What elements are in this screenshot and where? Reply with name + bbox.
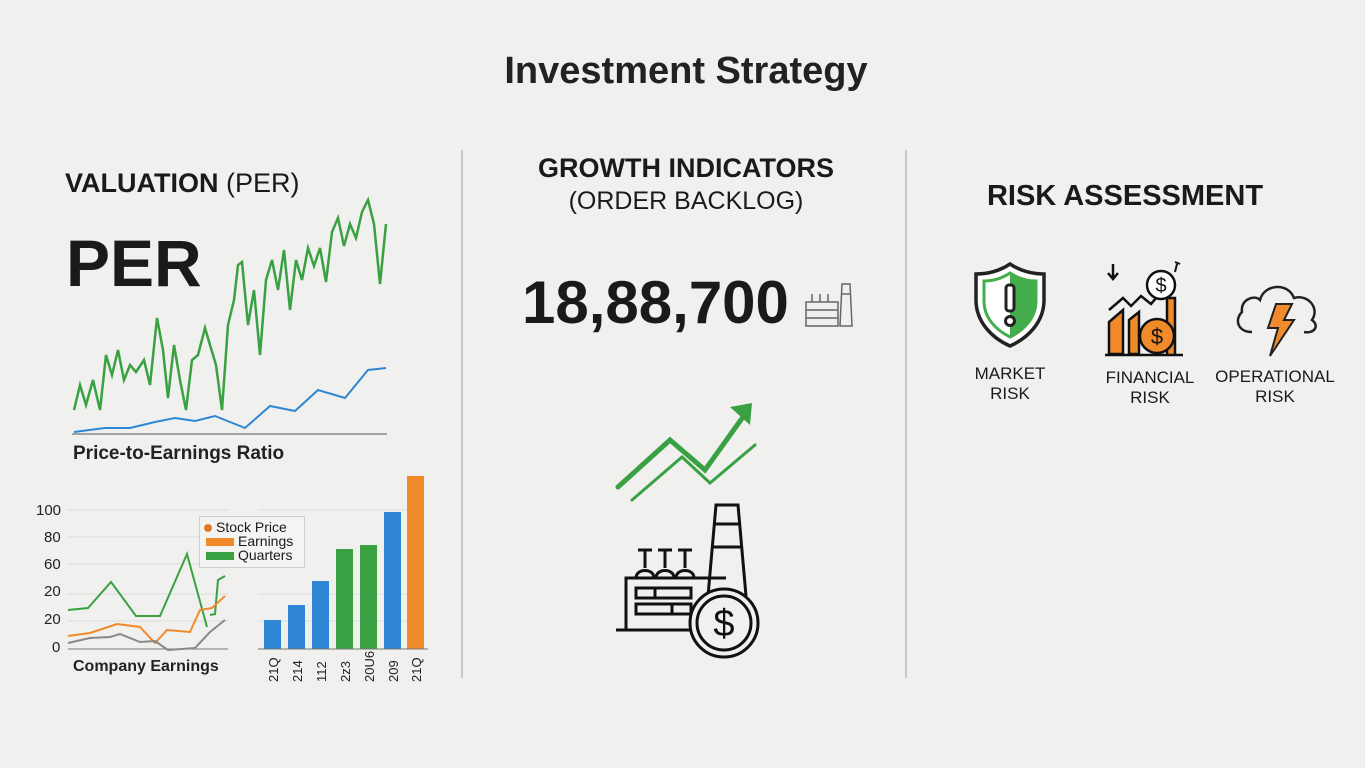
icon: factory with dollar: $ <box>713 603 735 645</box>
label market risk: RISK <box>990 384 1030 403</box>
divider right <box>905 150 907 678</box>
label operational risk: RISK <box>1255 387 1295 406</box>
legend <box>199 516 305 568</box>
line chart: company earnings <box>36 502 228 656</box>
divider left <box>461 150 463 678</box>
bar chart: 21Q <box>266 657 281 682</box>
label operational risk: OPERATIONAL <box>1215 367 1335 386</box>
icon: financial risk: $ <box>1155 275 1167 297</box>
panel: growth <box>522 153 853 658</box>
label operational risk <box>1215 367 1335 406</box>
bar chart <box>258 476 428 682</box>
bar chart: 214 <box>290 660 305 682</box>
label market risk <box>975 364 1045 403</box>
legend: Quarters <box>238 547 292 563</box>
icon: financial risk <box>1105 261 1194 407</box>
caption PER: Price-to-Earnings Ratio <box>73 443 284 464</box>
label financial risk <box>1106 368 1194 407</box>
legend: Earnings <box>238 533 293 549</box>
line chart: company earnings: 20 <box>44 611 61 628</box>
bar chart: 20U6 <box>362 651 377 682</box>
bar chart: 21Q <box>409 657 424 682</box>
icon: factory with dollar <box>616 504 760 658</box>
line chart: company earnings: 60 <box>44 556 61 573</box>
icon: growth arrow <box>616 403 757 502</box>
line chart: company earnings: 100 <box>36 502 61 519</box>
label market risk: MARKET <box>975 364 1045 383</box>
bar chart: 209 <box>386 660 401 682</box>
icon: operational risk <box>1215 286 1335 406</box>
heading: valuation: VALUATION (PER) <box>65 168 300 198</box>
bar chart: 2z3 <box>338 661 353 682</box>
line chart: company earnings: 20 <box>44 583 61 600</box>
line chart: company earnings: 0 <box>52 639 60 656</box>
panel: risk <box>974 180 1335 407</box>
heading growth: GROWTH INDICATORS <box>538 153 834 183</box>
caption earnings: Company Earnings <box>73 658 219 675</box>
heading risk: RISK ASSESSMENT <box>987 180 1263 212</box>
bar chart: 112 <box>314 661 329 682</box>
panel: valuation <box>36 168 428 682</box>
line chart: company earnings: 80 <box>44 529 61 546</box>
number: 18,88,700 <box>522 269 789 336</box>
icon: small factory <box>805 283 853 327</box>
title: Investment Strategy <box>504 50 868 92</box>
subheading: (ORDER BACKLOG) <box>569 187 803 215</box>
big text PER: PER <box>66 226 202 300</box>
label financial risk: RISK <box>1130 388 1170 407</box>
legend: Stock Price <box>216 519 287 535</box>
icon: financial risk: $ <box>1151 324 1163 349</box>
PER line chart <box>72 196 388 435</box>
icon: market risk <box>974 262 1046 403</box>
label financial risk: FINANCIAL <box>1106 368 1194 387</box>
